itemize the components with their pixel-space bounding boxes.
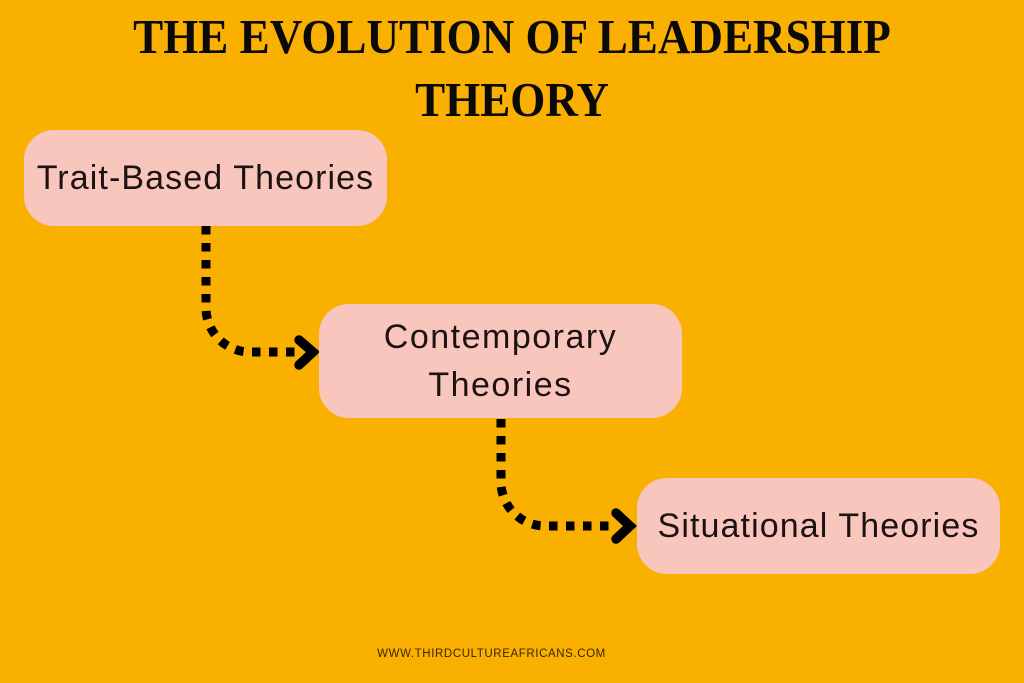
title: THE EVOLUTION OF LEADERSHIP [133,9,891,64]
box: contemporary theories [319,304,682,418]
box: trait-based theories [24,130,387,226]
box: contemporary theories: Contemporary [384,318,617,356]
title: THEORY [415,72,609,127]
box: contemporary theories: Theories [428,366,573,404]
arrow: trait-based to contemporary [202,226,319,370]
title [133,9,891,127]
box: trait-based theories: Trait-Based Theories [37,159,374,197]
box: situational theories: Situational Theories [658,507,979,545]
arrow: contemporary to situational [496,419,637,544]
box: situational theories [637,478,1000,574]
website footer: WWW.THIRDCULTUREAFRICANS.COM [377,648,606,660]
